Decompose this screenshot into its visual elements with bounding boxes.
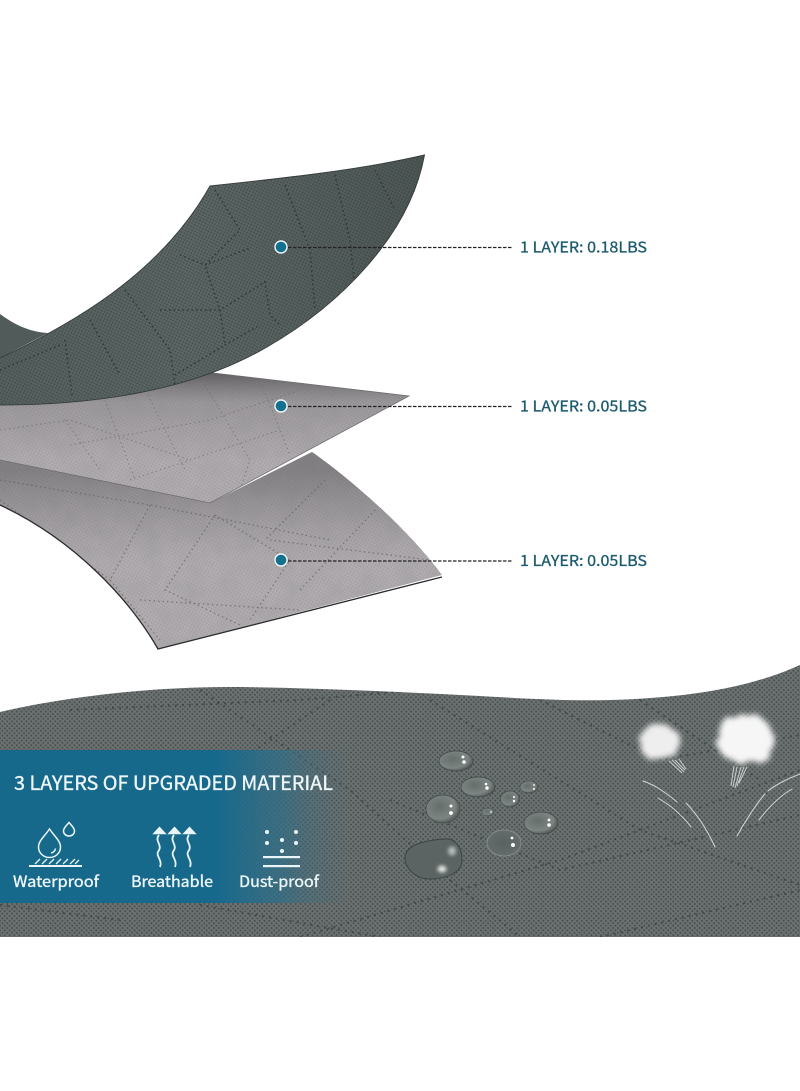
droplet 6 [482,808,494,816]
back fold of top layer [0,314,48,358]
fabric close-up band [0,665,800,937]
left puff [639,725,681,761]
droplet 5 [520,781,538,793]
callout: middle layer weight [275,396,647,416]
droplet 2 [461,777,495,797]
droplet 4 [500,791,520,807]
droplet 8 [487,830,521,856]
icon: dust-proof [263,830,300,867]
feature panel [0,750,352,903]
middle fabric layer [0,370,410,505]
large droplet [405,839,462,879]
droplet 1 [439,751,473,771]
water droplets [405,751,558,879]
panel background [0,750,352,903]
bottom fabric layer [0,450,450,650]
label: waterproof: Waterproof [13,870,100,892]
panel heading: 3 LAYERS OF UPGRADED MATERIAL [14,767,333,796]
callout: top layer weight: 1 LAYER: 0.18LBS [520,236,647,258]
icon: waterproof [29,822,82,866]
infographic canvas [0,154,800,937]
droplet 3 [426,795,460,823]
callout: top layer weight [275,236,647,258]
icon: breathable [153,827,196,867]
callout: bottom layer weight: 1 LAYER: 0.05LBS [520,550,647,571]
puff stems [669,759,747,788]
label: breathable: Breathable [131,870,213,892]
curved fibres [643,774,800,847]
dust puffs and fibres [639,714,800,847]
callout: middle layer weight: 1 LAYER: 0.05LBS [520,396,647,416]
top fabric layer [0,155,424,405]
right puff [716,714,774,764]
callout: bottom layer weight [275,550,647,571]
label: dust-proof: Dust-proof [239,870,320,892]
droplet 7 [524,812,558,834]
